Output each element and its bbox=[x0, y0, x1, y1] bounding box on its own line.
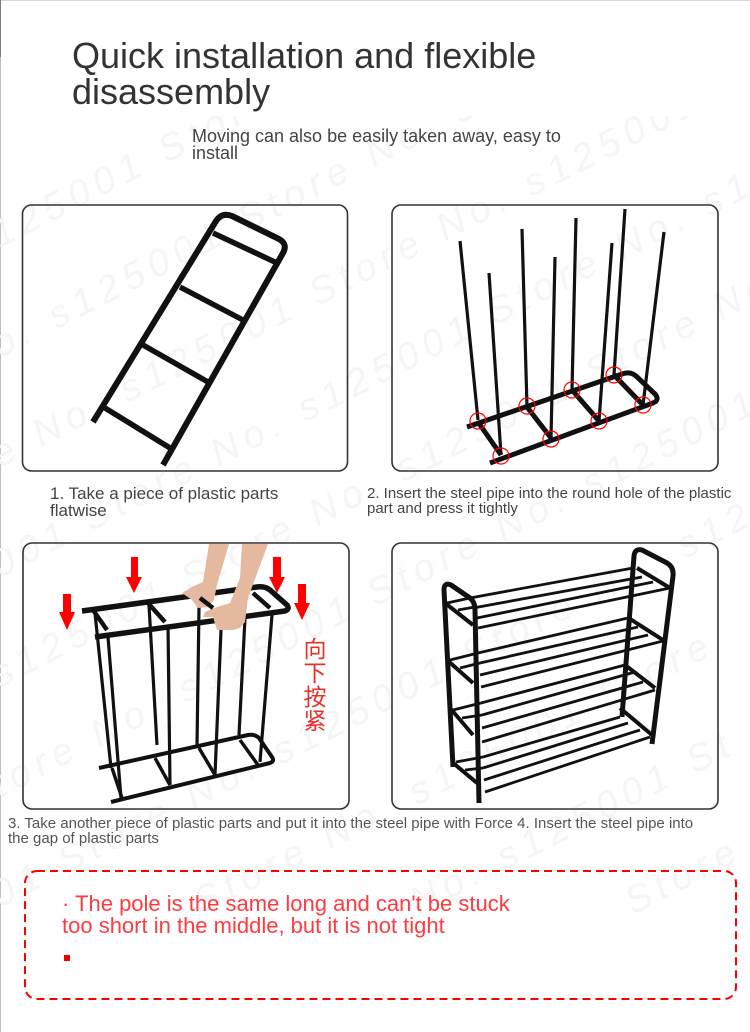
subtitle: install bbox=[192, 143, 238, 163]
icon: assembled shoe rack bbox=[444, 550, 673, 803]
subtitle: Moving can also be easily taken away, easy to bbox=[192, 126, 561, 146]
icon: plastic frame flat bbox=[93, 215, 285, 465]
label: press down: 按 bbox=[304, 684, 326, 710]
title: disassembly bbox=[72, 71, 270, 112]
text: e No. s125001 Store No. s125001 bbox=[0, 79, 709, 476]
icon: red hole markers bbox=[470, 367, 651, 464]
caption: step 2 bbox=[367, 485, 732, 517]
icon: arrow left bbox=[126, 557, 142, 593]
text: Store bbox=[618, 828, 749, 923]
subtitle bbox=[192, 126, 561, 163]
icon: rack with poles bbox=[82, 587, 288, 802]
label: press down: 向 bbox=[304, 636, 326, 662]
text: No. s125001 St bbox=[403, 722, 743, 923]
caption: step 1 bbox=[50, 484, 278, 520]
caption: steps 3 and 4: the gap of plastic parts bbox=[8, 830, 159, 847]
panel: step 2 insert steel pipes bbox=[392, 205, 718, 471]
callout: warning note bbox=[25, 871, 736, 999]
caption: step 2: 2. Insert the steel pipe into the round hole of the plastic bbox=[367, 485, 732, 502]
icon: arrow right bbox=[269, 557, 285, 593]
label: press down: 下 bbox=[304, 660, 326, 686]
title: Quick installation and flexible bbox=[72, 35, 536, 76]
caption: steps 3 and 4: 3. Take another piece of plastic parts and put it into the steel pipe with Force 4. Insert the steel pipe into bbox=[8, 815, 693, 832]
icon: bar over hand bbox=[200, 598, 213, 608]
text: o. s125001 Store No. s125001 bbox=[0, 6, 638, 366]
icon: hands pressing bbox=[182, 544, 268, 630]
icon: arrow far right bbox=[294, 584, 310, 620]
caption: step 1: flatwise bbox=[50, 501, 107, 520]
caption: step 2: part and press it tightly bbox=[367, 500, 518, 517]
panel: step 4 finished rack bbox=[392, 543, 718, 809]
label: press down bbox=[304, 636, 326, 734]
text: Store No. s125001 Store bbox=[187, 623, 722, 923]
caption: step 1: 1. Take a piece of plastic parts bbox=[50, 484, 278, 503]
label: press down: 紧 bbox=[304, 708, 326, 734]
callout text bbox=[62, 891, 511, 938]
panel: step 3 press down bbox=[23, 543, 349, 809]
caption: steps 3 and 4 bbox=[8, 815, 693, 847]
callout text: too short in the middle, but it is not tight bbox=[62, 913, 445, 938]
callout text: · The pole is the same long and can't be stuck bbox=[62, 891, 511, 916]
icon: red bullet bbox=[64, 955, 70, 961]
title bbox=[72, 35, 536, 112]
icon: base frame with steel pipes bbox=[460, 209, 664, 463]
panel: step 1 ladder frame bbox=[22, 205, 348, 471]
icon: arrow far left bbox=[59, 594, 75, 630]
